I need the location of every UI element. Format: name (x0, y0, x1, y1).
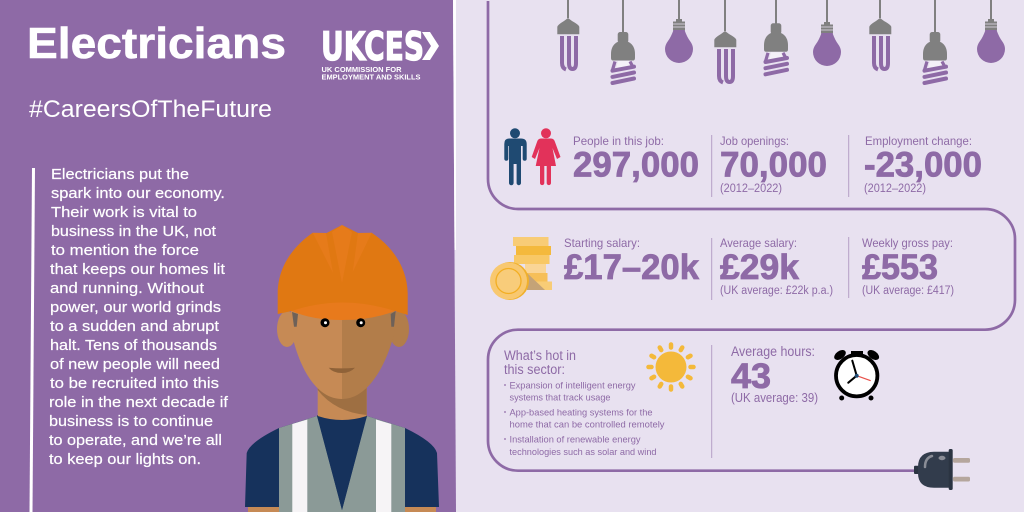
intro text: business is to continue (49, 413, 213, 430)
stat: job openings: (2012–2022) (720, 183, 782, 195)
connecting cable outline (488, 1, 1015, 471)
hanging light bulbs (557, 0, 1005, 83)
stat: weekly gross pay (862, 236, 954, 297)
intro text: Electricians put the (51, 166, 189, 183)
icon: man and woman (504, 128, 560, 185)
stat: job openings: 70,000 (720, 146, 827, 184)
stat: average hours: Average hours: (731, 343, 815, 359)
what's hot panel: systems that track usage (510, 392, 610, 402)
worker illustration (245, 225, 439, 512)
stat: starting salary: Starting salary: (564, 236, 640, 250)
what's hot panel: home that can be controlled remotely (510, 420, 665, 430)
intro text: to operate, and we’re all (49, 432, 222, 449)
stat: average salary: Average salary: (720, 236, 797, 250)
stat: average salary: (UK average: £22k p.a.) (720, 285, 833, 297)
stat: average salary (720, 236, 833, 297)
icon: sun (648, 344, 694, 390)
what's hot panel: Expansion of intelligent energy (510, 380, 636, 390)
stat: employment change: (2012–2022) (864, 183, 926, 195)
logo: UKCES: UK COMMISSION FOR (322, 65, 402, 74)
stat: people in this job: People in this job: (573, 134, 664, 148)
intro text: that keeps our homes lit (50, 261, 226, 278)
what's hot panel: this sector: (504, 362, 565, 377)
what's hot panel: App-based heating systems for the (510, 408, 652, 418)
intro text: role in the next decade if (49, 394, 229, 411)
intro text: power, our world grinds (50, 299, 221, 316)
intro text: of new people will need (50, 356, 220, 373)
intro text: to keep our lights on. (49, 451, 201, 468)
stat: employment change: Employment change: (865, 134, 972, 148)
what's hot panel: technologies such as solar and wind (510, 447, 656, 457)
logo: UKCES: EMPLOYMENT AND SKILLS (322, 72, 420, 82)
intro text (49, 166, 229, 468)
intro text: to mention the force (51, 242, 199, 259)
intro text: halt. Tens of thousands (50, 337, 217, 354)
stat: starting salary: £17–20k (564, 248, 700, 287)
intro text: business in the UK, not (51, 223, 217, 240)
logo: UKCES (321, 25, 439, 82)
logo: UKCES: UKCES (321, 25, 424, 70)
stat: average salary: £29k (720, 248, 800, 287)
intro text: spark into our economy. (51, 185, 225, 202)
quote bar (30, 168, 35, 512)
stat: job openings: Job openings: (720, 134, 789, 148)
stat: employment change (864, 134, 982, 195)
icon: coins (490, 237, 552, 300)
stat: average hours: 43 (731, 357, 771, 396)
intro text: to be recruited into this (50, 375, 219, 392)
intro text: Their work is vital to (51, 204, 197, 221)
hashtag: #CareersOfTheFuture (29, 96, 272, 123)
title: Electricians (27, 19, 286, 68)
stat: weekly gross pay: Weekly gross pay: (862, 236, 953, 250)
column dividers (712, 135, 849, 458)
left panel (0, 0, 456, 512)
stat: average hours (731, 343, 818, 405)
stat: weekly gross pay: £553 (862, 248, 938, 287)
what's hot panel: Installation of renewable energy (510, 435, 641, 445)
stat: employment change: -23,000 (864, 146, 982, 184)
icon: plug (914, 449, 970, 490)
stat: job openings (720, 134, 827, 195)
icon: alarm clock (832, 348, 881, 400)
stat: average hours: (UK average: 39) (731, 391, 818, 405)
intro text: to a sudden and abrupt (50, 318, 220, 335)
what's hot panel: What’s hot in (504, 348, 576, 363)
intro text: and running. Without (50, 280, 205, 297)
stat: weekly gross pay: (UK average: £417) (862, 285, 954, 297)
stat: people in this job: 297,000 (573, 146, 699, 184)
what's hot panel (504, 348, 665, 457)
